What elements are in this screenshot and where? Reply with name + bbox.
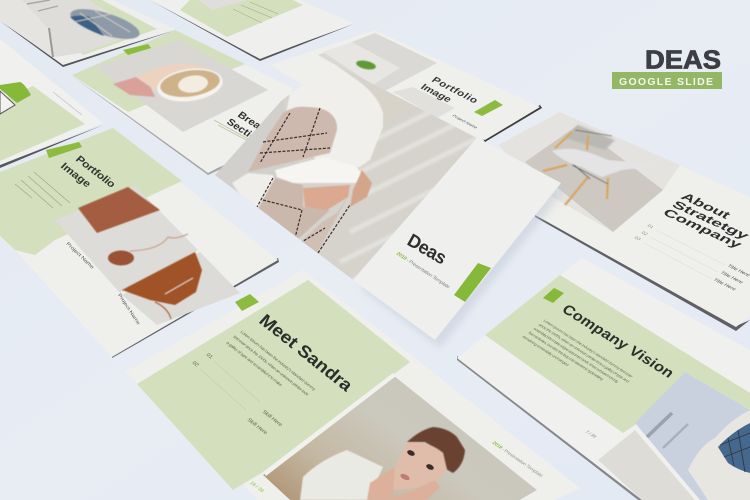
heading: deas: Deas: [404, 230, 450, 269]
panel: cover title: [353, 138, 561, 340]
portrait: white shirt: [300, 450, 383, 500]
list: skill items: [191, 352, 283, 436]
labels: project names: [65, 241, 141, 326]
heading: about stratetgy company: [660, 190, 750, 251]
accent bar: [474, 100, 503, 116]
title: deas: DEAS: [645, 46, 721, 74]
icon: phone outline: [0, 91, 15, 114]
photo: round building: [67, 3, 143, 45]
white sweater: [285, 63, 383, 167]
photo: scarf and sweater: [215, 63, 480, 297]
heading: portfolio image: Portfolio: [73, 154, 118, 190]
slide: break section: Section: [224, 117, 264, 147]
accent bar: [46, 142, 82, 158]
accent bar: [123, 44, 151, 55]
portrait: hair: [407, 427, 465, 473]
list: numbered items: 02: [640, 231, 649, 237]
accent bar: [454, 263, 491, 302]
label: 2019 presentation template: 2019 - Presentation Template: [490, 441, 544, 479]
body text: scrambled it to make a type specimen book. It has survived not only: [532, 327, 621, 384]
labels: title here: Title Here: [719, 271, 744, 285]
slide: break section: [72, 30, 295, 175]
heading: portfolio image: Image: [58, 161, 93, 190]
accent bar: [543, 288, 564, 303]
slide: phone mockup left: [0, 39, 103, 168]
heading: portfolio image: Image: [418, 83, 454, 105]
list: skill items: Skill Here: [246, 417, 268, 436]
heading: about stratetgy company: Stratetgy: [669, 198, 750, 242]
photo: towers: [647, 413, 688, 448]
photo: woman portrait: [263, 375, 537, 500]
slide: top center: [150, 0, 354, 61]
body text: Lorem Ipsum has been the industry's standard dummy text ever: [542, 319, 635, 379]
icon: green plant: [355, 59, 377, 71]
body text: five centuries, but also the leap into electronic typesetting: [527, 331, 605, 381]
slide: building photo top left: [0, 0, 176, 67]
list: skill items: Skill Here: [261, 409, 283, 428]
hands: [303, 185, 350, 210]
main slide: deas cover: [215, 63, 561, 340]
photo: sky: [635, 372, 750, 500]
photo: concrete wall: [598, 430, 695, 500]
pink scarf upper: [248, 107, 337, 172]
list: skill items: 02: [191, 360, 200, 368]
heading: break section: Break: [235, 110, 268, 135]
heading: company vision: Company Vision: [558, 302, 677, 381]
white fold: [275, 157, 362, 183]
pink scarf lower: [257, 178, 330, 240]
heading: meet sandra: Meet Sandra: [255, 311, 357, 395]
photo: coffee cup and hand: [113, 64, 225, 105]
photo: yarn ball: [108, 234, 188, 266]
subtitle: 2019 presentation template: 2019 - Presentation Template: [395, 251, 451, 290]
body text: since the 1500s, when an unknown printer took a galley of type and: [537, 323, 631, 384]
label: project name: Project Name: [451, 114, 480, 130]
accent bar: [235, 294, 259, 311]
brand lockup: [612, 46, 722, 89]
portrait: right hand: [388, 480, 440, 500]
body text: Lorem Ipsum has been the industry's standard dummy: [239, 329, 318, 392]
body text: a galley of type and scrambled it to make: [225, 340, 284, 387]
shadow under cover: [360, 186, 568, 348]
icon: green phone back: [0, 82, 31, 103]
list: numbered items: 03: [633, 236, 642, 242]
list: numbered items: 01: [646, 224, 655, 230]
list: numbered items: [633, 224, 655, 242]
labels: project names: Project Name: [117, 293, 141, 326]
portrait: left hand: [367, 467, 395, 500]
body text lines: [15, 172, 70, 208]
slide: portfolio knit: [0, 128, 279, 358]
page number: 16 / 39: [249, 480, 265, 494]
badge: google slide: GOOGLE SLIDE: [619, 76, 713, 88]
left white fabric: [232, 172, 274, 208]
body text: text ever since the 1500s, when an unknown printer took: [232, 334, 311, 397]
page number: 7 / 39: [584, 430, 598, 439]
photo: knit with needle: [122, 252, 202, 319]
photo: white chair: [543, 130, 665, 205]
labels: title here: Title Here: [712, 278, 737, 292]
photo: knit sample: [78, 187, 160, 233]
portrait: face: [393, 442, 447, 490]
heading: about stratetgy company: About: [678, 190, 734, 221]
slide: meet sandra: [125, 270, 580, 500]
slide: portfolio top right: [270, 30, 542, 142]
labels: title here: [712, 264, 750, 292]
labels: project names: Project Name: [65, 241, 95, 270]
heading: about stratetgy company: Company: [660, 206, 746, 251]
photo: round building: [688, 410, 750, 500]
list: skill items: 01: [205, 352, 214, 360]
heading: portfolio image: Portfolio: [429, 76, 480, 106]
body text: remaining essentially unchanged: [521, 335, 571, 367]
slide: company vision: [457, 258, 750, 500]
slide: about strategy company: [498, 112, 750, 331]
